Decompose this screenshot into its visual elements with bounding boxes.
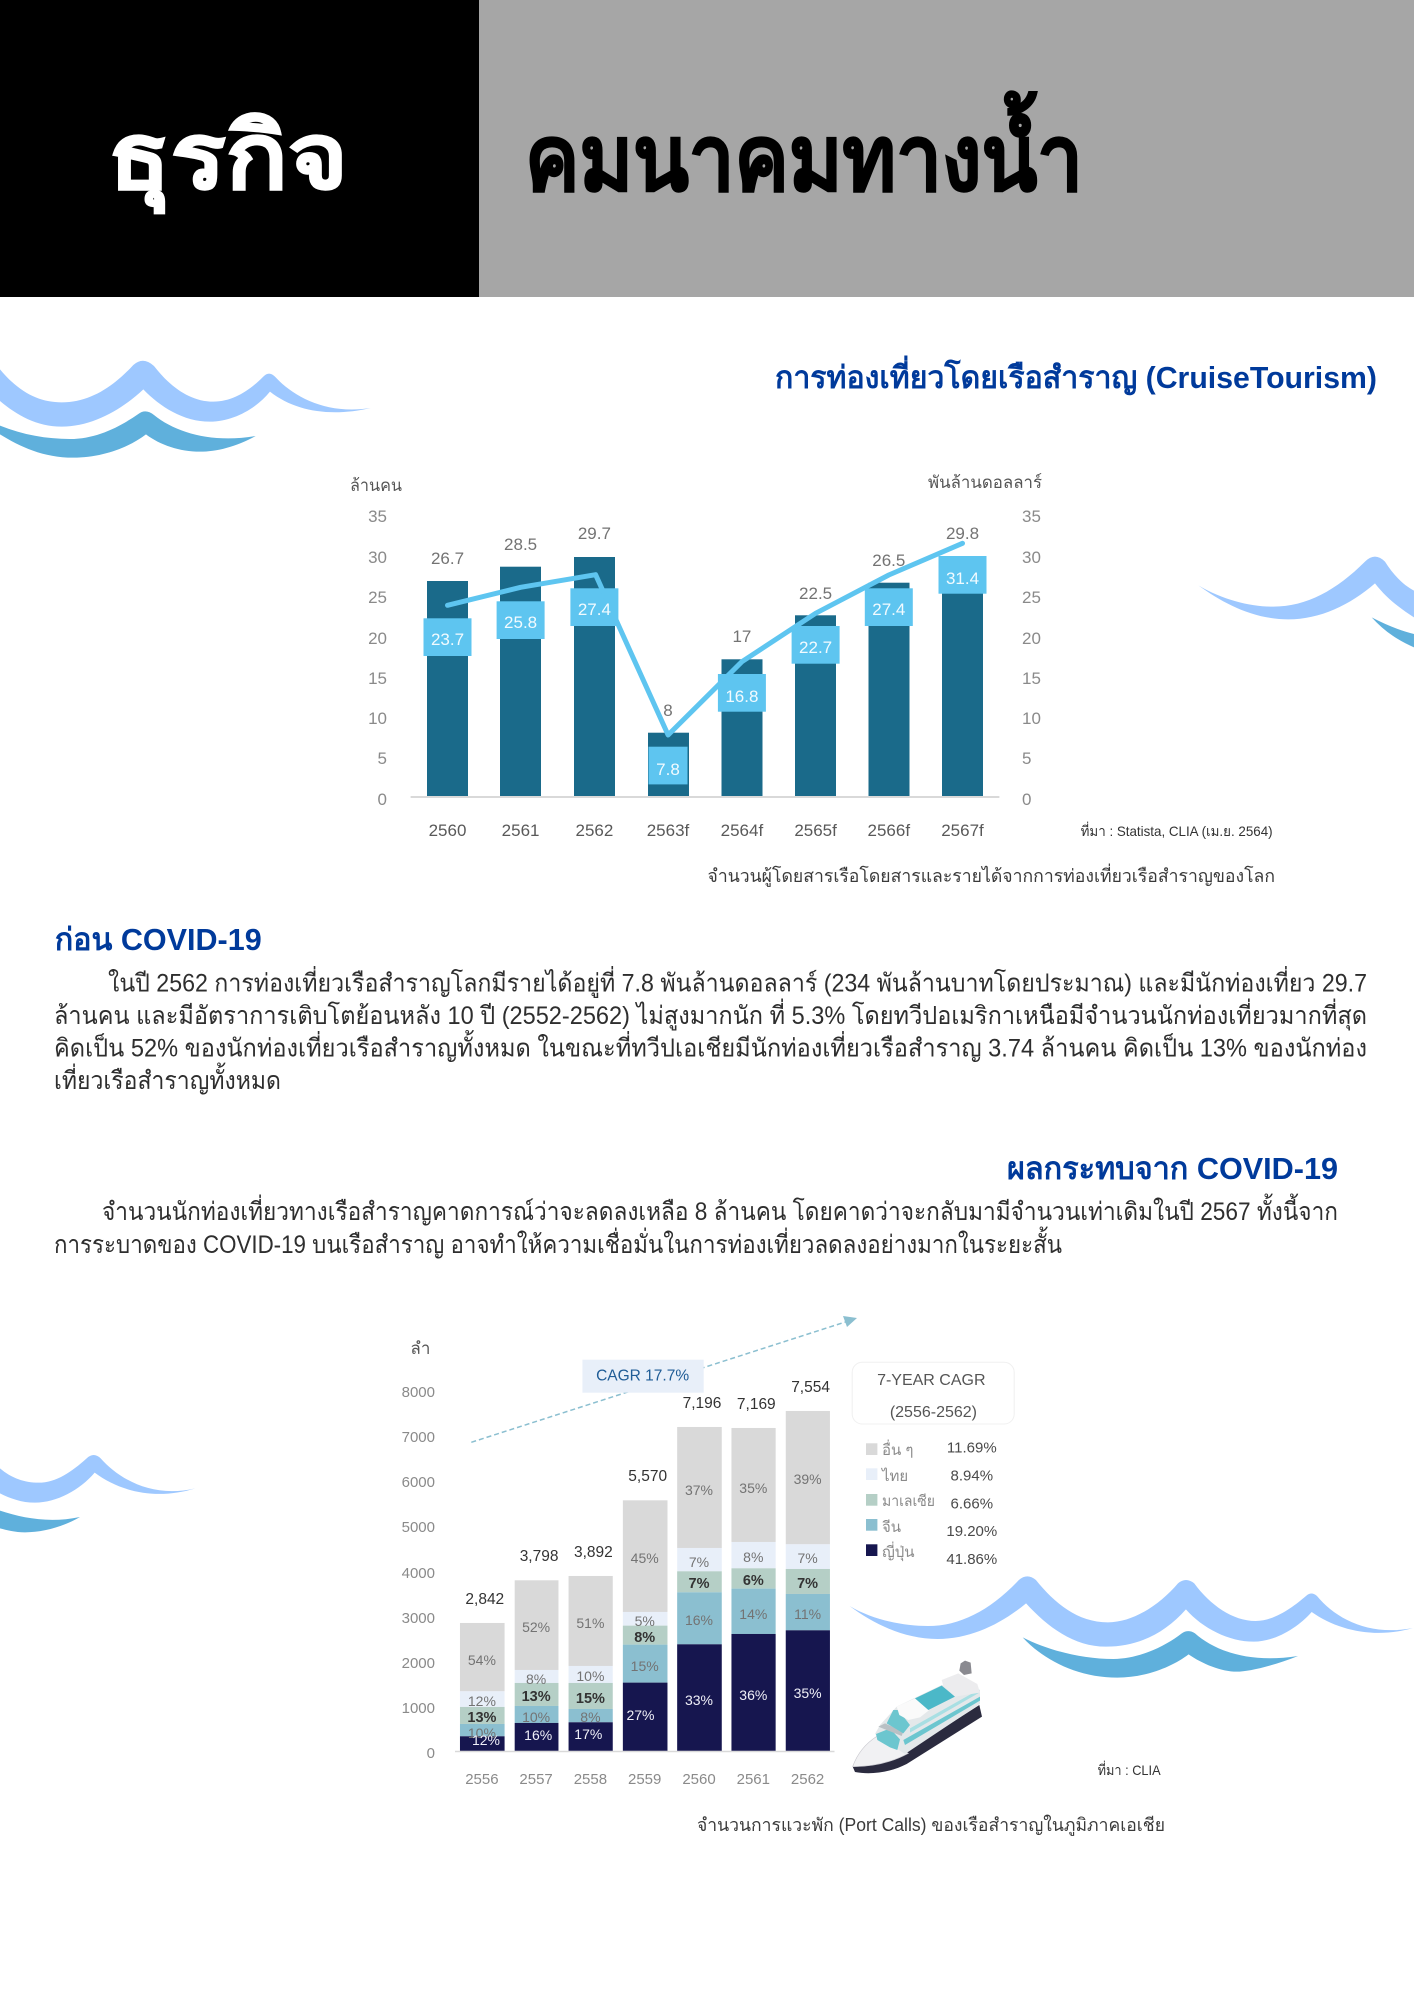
legend: 41.86% [946, 1551, 997, 1568]
percent labels: others: 8% [580, 1709, 601, 1725]
year labels: 2562 [575, 821, 613, 840]
source: chart 1: ที่มา : Statista, CLIA (เม.ย. 2564) [1081, 822, 1273, 839]
paragraph: before covid: ล้านคน และมีอัตราการเติบโตย้อนหลัง 10 ปี (2552-2562) ไม่สูงมากนัก ที่ 5.3% โดยทวีปอเมริกาเหนือมีจำนวนนักท่องเที่ยวมากที่สุด [54, 998, 1367, 1031]
percent labels: japan: 16% [524, 1727, 552, 1743]
left axis numbers: 25 [368, 588, 387, 607]
revenue values: 23.7 [431, 630, 464, 649]
right axis numbers [1022, 507, 1041, 809]
percent labels: japan: 17% [574, 1726, 602, 1742]
revenue line [448, 543, 962, 735]
left axis numbers: 20 [368, 629, 387, 648]
percent labels: others: 16% [685, 1612, 713, 1628]
wave mid left [0, 1455, 195, 1532]
stacked bars [460, 1411, 830, 1751]
right axis numbers: 25 [1022, 588, 1041, 607]
cagr label [582, 1360, 704, 1393]
percent labels: others: 35% [739, 1480, 767, 1496]
legend: มาเลเซีย [882, 1493, 935, 1510]
bar totals: 7,196 [683, 1395, 721, 1412]
paragraph: covid impact: การระบาดของ COVID-19 บนเรือสำราญ อาจทำให้ความเชื่อมั่นในการท่องเที่ยวลดลงอย่างมากในระยะสั้น [54, 1226, 1062, 1259]
y axis numbers: 0 [427, 1745, 435, 1762]
left axis numbers: 15 [368, 669, 387, 688]
bar totals: 3,892 [574, 1544, 613, 1561]
paragraph: before covid: คิดเป็น 52% ของนักท่องเที่ยวเรือสำราญทั้งหมด ในขณะที่ทวีปเอเชียมีนักท่องเที่ยวเรือสำราญ 3.74 ล้านคน คิดเป็น 13% ของนักท่อง [54, 1030, 1367, 1063]
percent labels: others: 45% [631, 1550, 659, 1566]
percent labels: malaysia: 15% [576, 1691, 605, 1707]
y axis numbers: 2000 [402, 1655, 435, 1672]
right axis numbers: 30 [1022, 548, 1041, 567]
y axis numbers: 1000 [402, 1700, 435, 1717]
percent labels: japan: 36% [739, 1687, 767, 1703]
paragraph: before covid: เที่ยวเรือสำราญทั้งหมด [54, 1062, 281, 1095]
header band [0, 0, 1414, 297]
passenger values: 26.7 [431, 549, 464, 568]
y axis numbers: 7000 [402, 1429, 435, 1446]
cagr legend box: 7-YEAR CAGR [877, 1372, 986, 1389]
percent labels: others: 54% [468, 1652, 496, 1668]
percent labels: others: 15% [631, 1658, 659, 1674]
passenger values: 29.7 [578, 524, 611, 543]
chart: passengers and revenue [350, 473, 1042, 840]
percent labels: others: 10% [576, 1668, 604, 1684]
percent labels: malaysia: 7% [689, 1576, 710, 1592]
year labels: 2566f [868, 821, 910, 840]
heading: covid impact: ผลกระทบจาก COVID-19 [1007, 1151, 1338, 1186]
year labels: 2557 [519, 1771, 553, 1788]
year labels [429, 821, 984, 840]
cagr arrow [471, 1316, 857, 1442]
y axis unit left: ล้านคน [350, 476, 402, 495]
percent labels: others: 51% [576, 1615, 604, 1631]
paragraph: before covid [54, 966, 1367, 1095]
paragraph: covid impact [54, 1193, 1338, 1259]
year labels: 2556 [465, 1771, 499, 1788]
cagr label: CAGR 17.7% [596, 1368, 689, 1384]
year labels: 2560 [682, 1771, 716, 1788]
left axis numbers [368, 507, 387, 809]
percent labels: others: 7% [797, 1550, 818, 1566]
bar totals: 2,842 [465, 1591, 504, 1608]
cagr legend box [852, 1362, 1014, 1424]
passenger values: 26.5 [872, 551, 905, 570]
percent labels: others: 11% [794, 1606, 821, 1622]
legend: 6.66% [951, 1496, 993, 1512]
percent labels: others: 5% [635, 1613, 655, 1629]
year labels: 2563f [647, 821, 690, 840]
bar totals [465, 1379, 830, 1608]
y axis numbers [402, 1384, 435, 1762]
year labels: 2565f [794, 821, 837, 840]
wave bottom right [850, 1576, 1413, 1678]
y axis numbers: 5000 [402, 1519, 435, 1536]
percent labels: others: 10% [522, 1709, 550, 1725]
legend [866, 1439, 997, 1568]
year labels [465, 1771, 824, 1788]
bar totals: 7,554 [791, 1379, 830, 1396]
y axis numbers: 3000 [402, 1610, 435, 1627]
legend: 19.20% [946, 1523, 997, 1540]
revenue values: 22.7 [799, 638, 832, 657]
revenue values: 16.8 [725, 687, 758, 706]
caption: chart 1: จำนวนผู้โดยสารเรือโดยสารและรายได้จากการท่องเที่ยวเรือสำราญของโลก [708, 863, 1275, 887]
percent labels: japan: 27% [626, 1707, 655, 1723]
passenger values: 8 [663, 701, 673, 720]
year labels: 2564f [721, 821, 763, 840]
unit label: ลำ [410, 1339, 430, 1358]
right axis numbers: 5 [1022, 749, 1031, 768]
left axis numbers: 30 [368, 548, 387, 567]
passenger values: 17 [732, 627, 751, 646]
right axis numbers: 20 [1022, 629, 1041, 648]
title: transport: คมนาคมทางน้ำ [525, 91, 1083, 210]
caption: chart 2: จำนวนการแวะพัก (Port Calls) ของเรือสำราญในภูมิภาคเอเชีย [697, 1814, 1165, 1836]
passenger bars [427, 556, 983, 797]
title: business: ธุรกิจ [108, 106, 348, 214]
left axis numbers: 5 [378, 749, 387, 768]
legend: ไทย [881, 1467, 908, 1485]
bar totals: 3,798 [520, 1548, 558, 1565]
percent labels: malaysia: 7% [797, 1576, 818, 1592]
year labels: 2567f [941, 821, 984, 840]
passenger values [431, 524, 979, 720]
year labels: 2559 [628, 1771, 661, 1788]
cagr legend box: (2556-2562) [890, 1404, 977, 1421]
revenue values: 27.4 [578, 600, 611, 619]
left axis numbers: 35 [368, 507, 387, 526]
year labels: 2562 [791, 1771, 824, 1788]
legend: 8.94% [951, 1468, 993, 1484]
right axis numbers: 0 [1022, 790, 1031, 809]
legend: อื่น ๆ [882, 1439, 914, 1459]
percent labels: others: 37% [685, 1482, 713, 1498]
heading: before covid: ก่อน COVID-19 [55, 922, 262, 957]
right axis numbers: 15 [1022, 669, 1041, 688]
revenue values: 27.4 [872, 600, 905, 619]
passenger values: 22.5 [799, 584, 832, 603]
bar totals: 5,570 [628, 1468, 667, 1485]
percent labels: others: 39% [794, 1471, 822, 1487]
revenue boxes [424, 556, 986, 784]
percent labels: others: 8% [743, 1549, 763, 1565]
left axis numbers: 0 [378, 790, 387, 809]
chart: port calls [402, 1316, 857, 1788]
percent labels: malaysia: 6% [743, 1573, 764, 1589]
percent labels: malaysia: 13% [467, 1710, 497, 1726]
bar totals: 7,169 [737, 1396, 776, 1413]
percent labels: others: 52% [522, 1619, 550, 1635]
heading: cruise tourism: การท่องเที่ยวโดยเรือสำราญ (CruiseTourism) [775, 355, 1377, 396]
y axis numbers: 8000 [402, 1384, 435, 1401]
percent labels: others: 14% [739, 1606, 767, 1622]
wave top left [0, 361, 371, 458]
percent labels: japan: 12% [472, 1732, 500, 1748]
percent labels: others: 12% [468, 1693, 496, 1709]
year labels: 2561 [737, 1771, 770, 1788]
revenue values [431, 569, 979, 779]
y axis unit right: พันล้านดอลลาร์ [928, 473, 1042, 492]
percent labels: others: 10% [468, 1725, 496, 1741]
revenue values: 25.8 [504, 613, 537, 632]
percent labels: malaysia: 8% [634, 1630, 655, 1646]
percent labels: japan: 35% [794, 1685, 822, 1701]
revenue values: 7.8 [656, 760, 680, 779]
percent labels: japan: 33% [685, 1692, 713, 1708]
percent labels: malaysia: 13% [522, 1689, 551, 1705]
percent labels: others: 7% [689, 1554, 709, 1570]
legend: จีน [882, 1519, 901, 1536]
wave top right [1198, 557, 1414, 647]
percent labels: malaysia [467, 1573, 818, 1726]
year labels: 2561 [502, 821, 540, 840]
right axis numbers: 35 [1022, 507, 1041, 526]
left axis numbers: 10 [368, 709, 387, 728]
passenger values: 28.5 [504, 535, 537, 554]
passenger values: 29.8 [946, 524, 979, 543]
icon: cruise ship [853, 1661, 982, 1773]
percent labels: japan [472, 1685, 822, 1748]
y axis numbers: 6000 [402, 1474, 435, 1491]
y axis numbers: 4000 [402, 1565, 435, 1582]
percent labels: others: 8% [526, 1671, 546, 1687]
revenue values: 31.4 [946, 569, 979, 588]
source: chart 2: ที่มา : CLIA [1098, 1761, 1161, 1778]
percent labels: others [468, 1471, 822, 1741]
year labels: 2560 [429, 821, 466, 840]
right axis numbers: 10 [1022, 709, 1041, 728]
legend: ญี่ปุ่น [882, 1541, 915, 1562]
year labels: 2558 [574, 1771, 607, 1788]
legend: 11.69% [947, 1440, 997, 1456]
